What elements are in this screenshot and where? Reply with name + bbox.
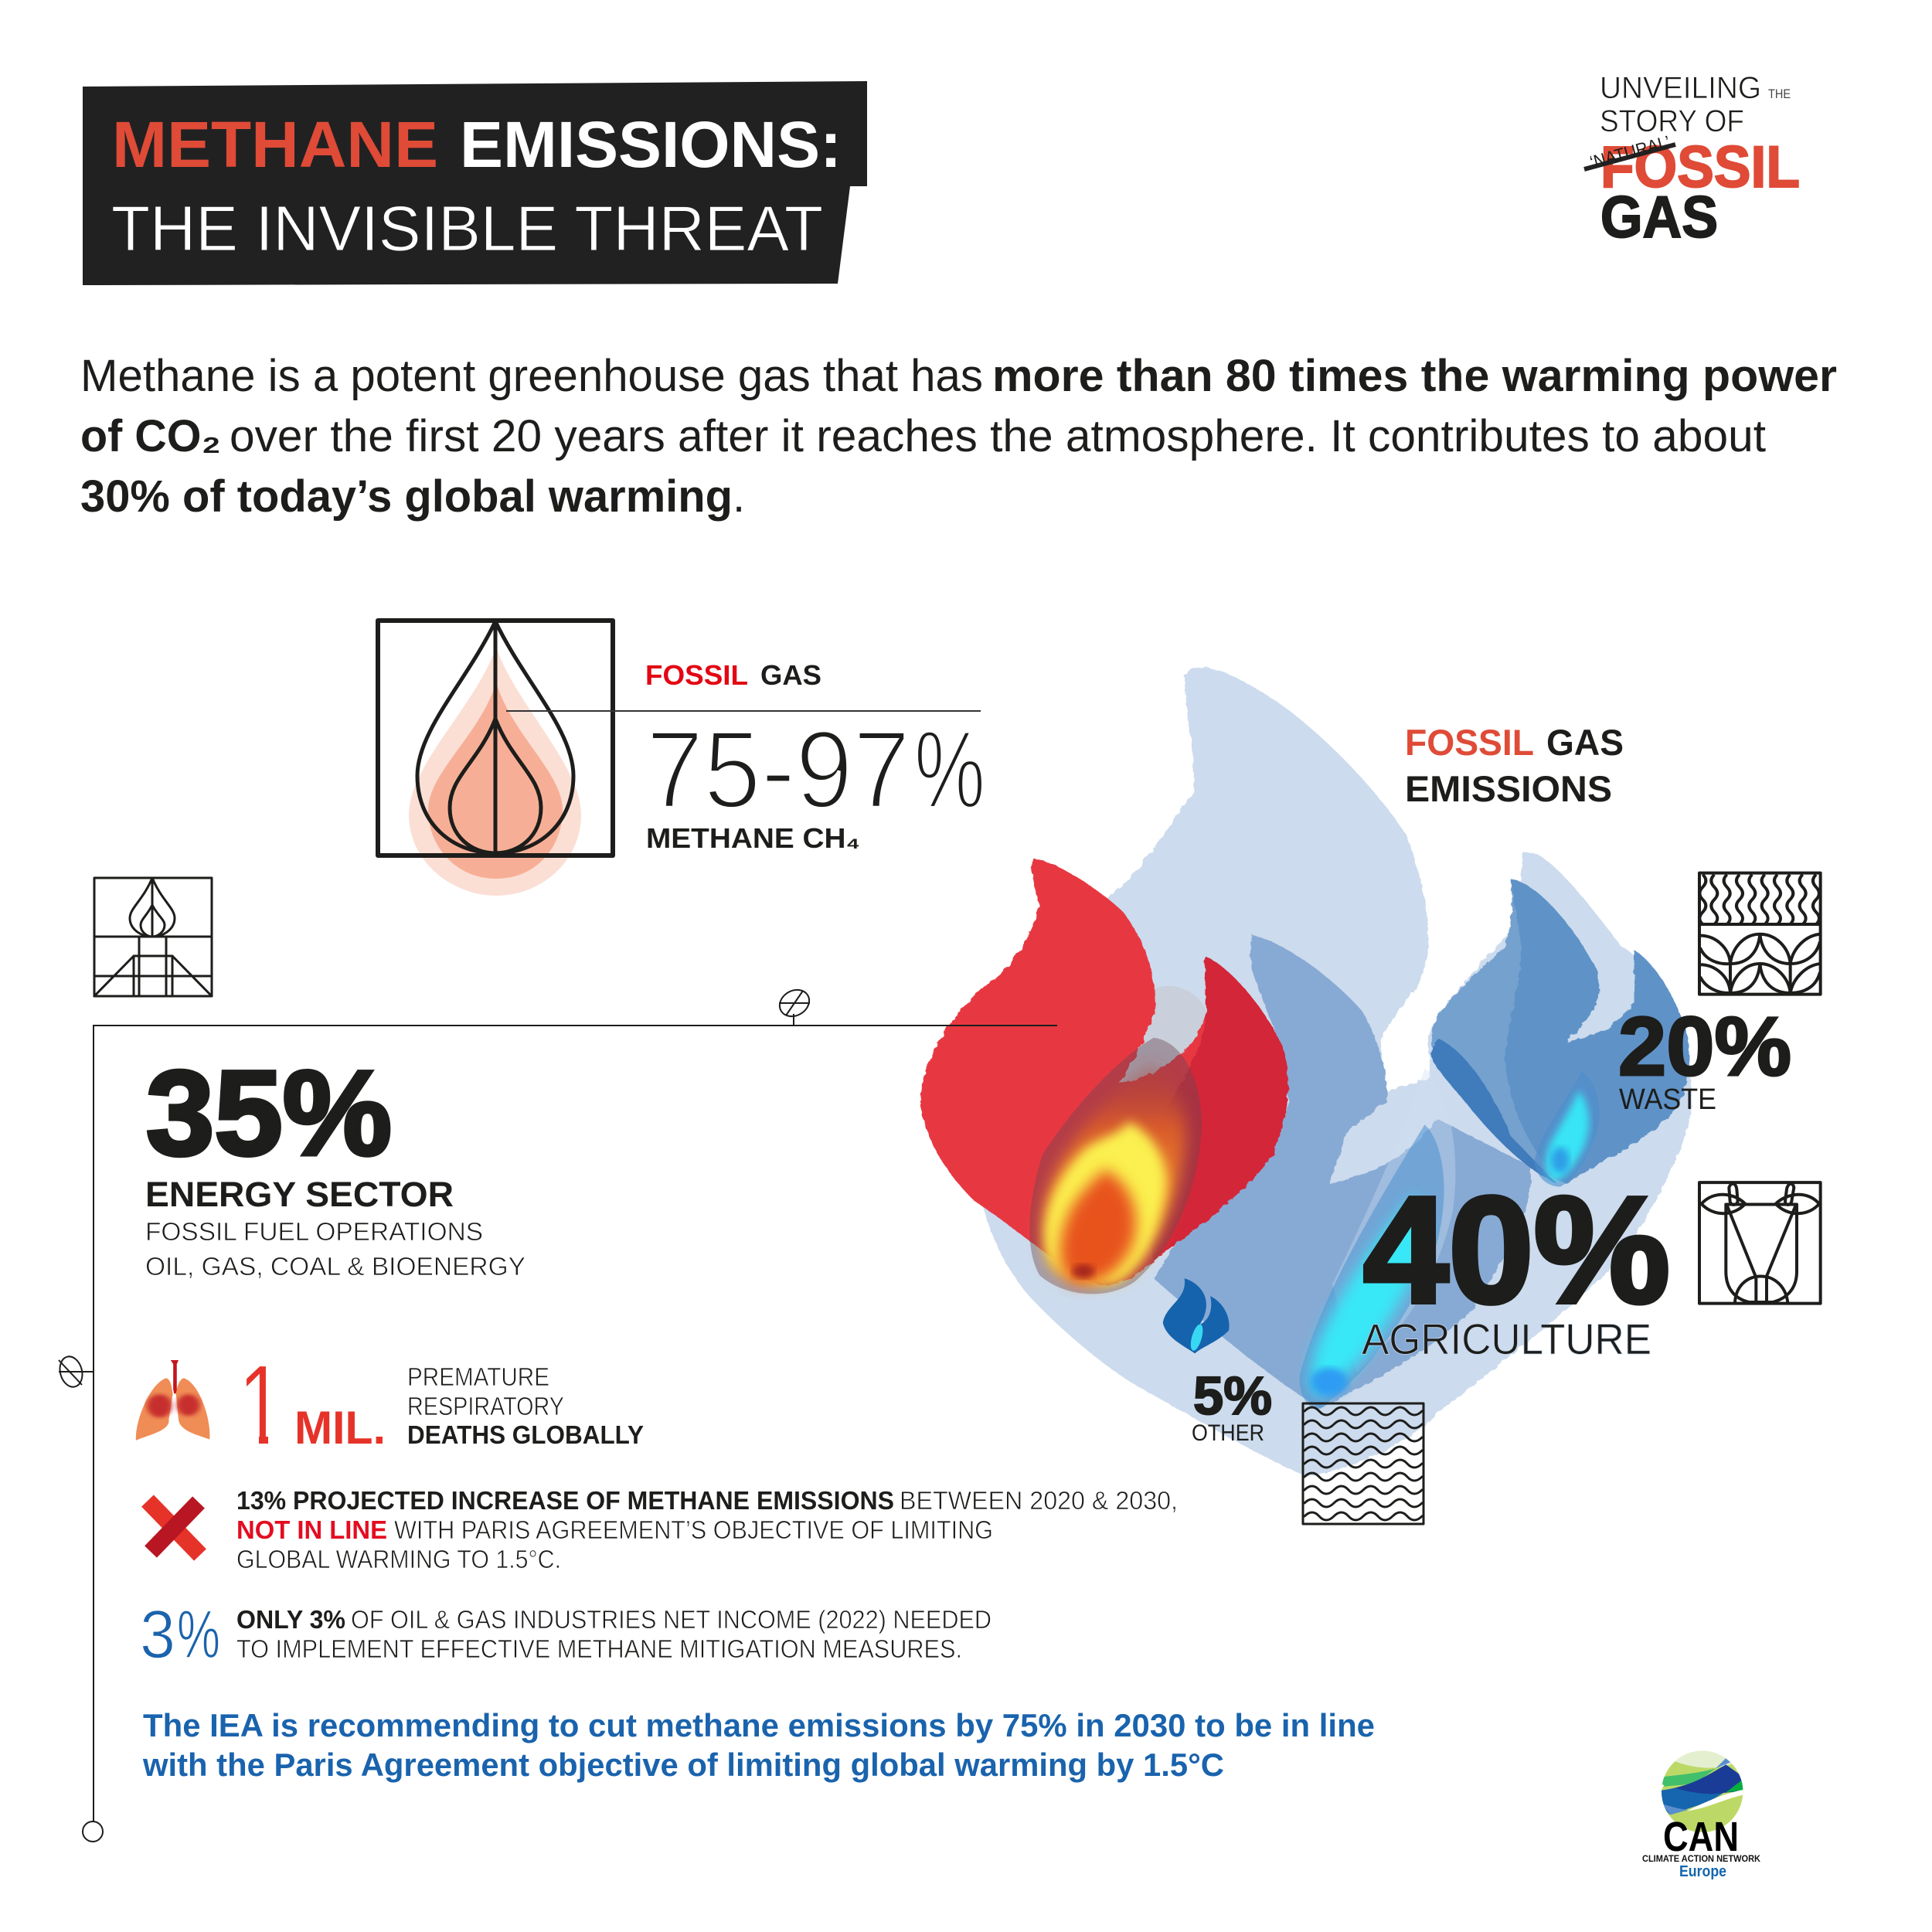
mid blue flame: [1154, 935, 1531, 1409]
intro paragraph: of CO₂: [80, 411, 221, 461]
pale background flame: [981, 668, 1692, 1477]
stat: one million deaths: PREMATURE: [407, 1362, 549, 1391]
icon: red cross: [148, 1501, 200, 1555]
heading: fossil gas emissions: EMISSIONS: [1405, 768, 1612, 809]
intro paragraph: [80, 351, 1837, 522]
series logo: unveiling the story of fossil gas: UNVEILING: [1600, 71, 1761, 105]
fossil gas methane share: FOSSIL: [645, 659, 748, 691]
fossil gas methane share: METHANE CH₄: [646, 822, 860, 854]
stat: agriculture 40%: 40%: [1363, 1165, 1670, 1335]
heading: fossil gas emissions: GAS: [1546, 722, 1624, 763]
icon: gas flare rig: [94, 878, 212, 996]
series logo: unveiling the story of fossil gas: FOSSIL: [1600, 134, 1800, 200]
title block: [83, 81, 867, 285]
fire core: [1060, 1169, 1136, 1284]
right blue flame: [1431, 879, 1689, 1184]
energy sector stat: FOSSIL FUEL OPERATIONS: [145, 1217, 483, 1246]
title block: EMISSIONS:: [460, 108, 842, 181]
agriculture flame: [1332, 1068, 1455, 1373]
series logo: unveiling the story of fossil gas: [1584, 71, 1800, 250]
fossil gas methane share: [506, 659, 985, 854]
fire halo: [1029, 1038, 1202, 1294]
title block: METHANE: [112, 108, 438, 181]
stat: waste 20%: WASTE: [1619, 1083, 1716, 1116]
right flame darker layer: [1505, 879, 1689, 1184]
logo: Climate Action Network Europe: Europe: [1679, 1863, 1726, 1880]
icon: waste leaves and waves: [1699, 873, 1821, 995]
series logo: unveiling the story of fossil gas: THE: [1768, 87, 1791, 101]
stat: other 5%: OTHER: [1192, 1420, 1264, 1446]
logo: Climate Action Network Europe: [1642, 1749, 1760, 1880]
intro paragraph: Methane is a potent greenhouse gas that has: [80, 351, 983, 401]
icon: lungs: [136, 1360, 209, 1440]
right flame inner lobe: [1431, 1039, 1557, 1184]
IEA recommendation: The IEA is recommending to cut methane emissions by 75% in 2030 to be in line: [143, 1707, 1375, 1743]
energy sector stat: 35%: [146, 1046, 392, 1181]
series logo: unveiling the story of fossil gas: STORY OF: [1600, 104, 1744, 138]
stat: one million deaths: [236, 1342, 644, 1469]
energy sector stat: [145, 1046, 526, 1281]
heading: fossil gas emissions: [1405, 722, 1624, 809]
projected increase text: GLOBAL WARMING TO 1.5°C.: [236, 1545, 561, 1573]
other flame: [1163, 1278, 1230, 1353]
flames illustration: fossil gas emissions by source: [920, 668, 1692, 1477]
mitigation cost stat: ONLY 3%: [236, 1605, 345, 1634]
intro paragraph: .: [733, 471, 745, 522]
fossil gas methane share: %: [914, 709, 985, 832]
mitigation cost stat: OF OIL & GAS INDUSTRIES NET INCOME (2022) NEEDED: [351, 1605, 992, 1634]
series logo: unveiling the story of fossil gas: ‘NATURAL’: [1588, 131, 1672, 172]
icon: water waves: [1303, 1403, 1423, 1524]
stat: one million deaths: MIL.: [294, 1402, 386, 1454]
intro paragraph: 30% of today’s global warming: [80, 471, 733, 522]
projected increase text: BETWEEN 2020 & 2030,: [900, 1486, 1178, 1515]
waste flame: [1534, 1071, 1600, 1187]
icon: large gas flame in square: [378, 621, 613, 896]
logo: Climate Action Network Europe: CAN: [1663, 1814, 1739, 1860]
mitigation cost stat: %: [177, 1596, 220, 1672]
stat: one million deaths: 1: [238, 1342, 284, 1469]
stat: agriculture 40%: AGRICULTURE: [1362, 1315, 1651, 1363]
pale lobe behind flame: [1120, 986, 1209, 1086]
title block: THE INVISIBLE THREAT: [111, 192, 823, 264]
intro paragraph: over the first 20 years after it reaches the atmosphere. It contributes to about: [230, 411, 1766, 461]
projected increase text: [236, 1486, 1178, 1573]
logo: Climate Action Network Europe: CLIMATE ACTION NETWORK: [1642, 1853, 1760, 1864]
fire yellow layer: [1046, 1121, 1166, 1284]
projected increase text: NOT IN LINE: [236, 1515, 387, 1544]
IEA recommendation: with the Paris Agreement objective of limiting global warming by 1.5°C: [142, 1747, 1224, 1783]
IEA recommendation: [142, 1707, 1375, 1783]
mitigation cost stat: 3: [140, 1596, 175, 1672]
timeline rule with markers: [56, 985, 1057, 1842]
stat: other 5%: 5%: [1193, 1366, 1272, 1426]
energy sector stat: OIL, GAS, COAL & BIOENERGY: [145, 1252, 526, 1281]
series logo: unveiling the story of fossil gas: GAS: [1600, 185, 1718, 250]
red flame: [920, 859, 1288, 1285]
fire orange layer: [1043, 1060, 1185, 1283]
projected increase text: 13% PROJECTED INCREASE OF METHANE EMISSIONS: [236, 1486, 894, 1515]
stat: waste 20%: 20%: [1618, 999, 1791, 1093]
heading: fossil gas emissions: FOSSIL: [1405, 722, 1534, 763]
stat: one million deaths: RESPIRATORY: [407, 1392, 564, 1420]
intro paragraph: more than 80 times the warming power: [992, 351, 1837, 401]
fossil gas methane share: GAS: [760, 659, 821, 691]
projected increase text: WITH PARIS AGREEMENT’S OBJECTIVE OF LIMITING: [394, 1515, 993, 1544]
stat: one million deaths: DEATHS GLOBALLY: [407, 1420, 644, 1449]
energy sector stat: ENERGY SECTOR: [145, 1175, 454, 1214]
mitigation cost stat: [140, 1596, 992, 1672]
icon: cow: [1699, 1182, 1821, 1304]
red flame darker side: [1135, 956, 1288, 1260]
mitigation cost stat: TO IMPLEMENT EFFECTIVE METHANE MITIGATION MEASURES.: [236, 1634, 962, 1663]
fossil gas methane share: 75-97: [646, 709, 910, 832]
